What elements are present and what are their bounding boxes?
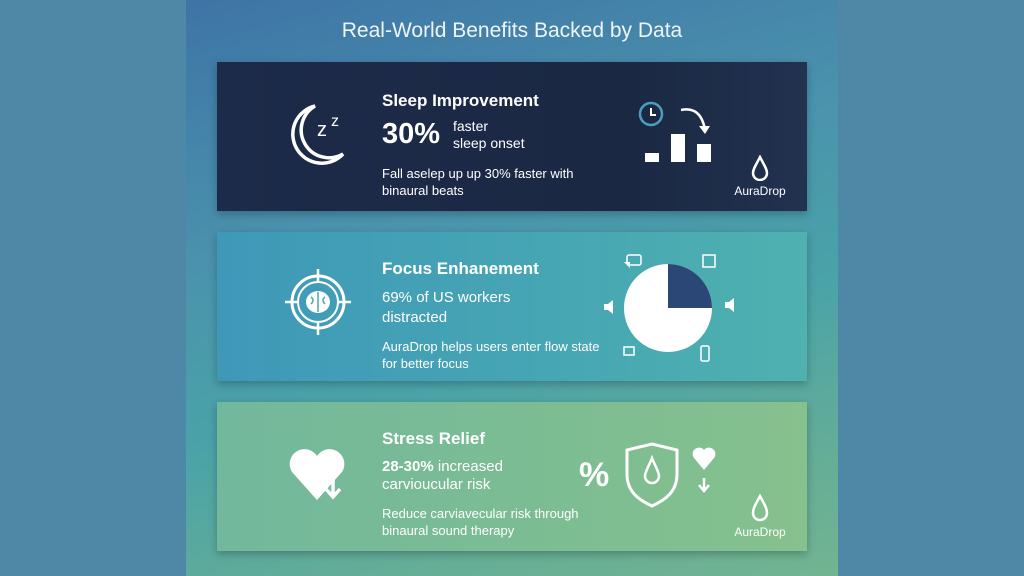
description: binaural sound therapy (382, 523, 514, 538)
icon: heart down (290, 449, 344, 500)
stat: 69% of US workers (382, 289, 510, 306)
stat: 28-30% increased (382, 458, 503, 475)
description: binaural beats (382, 183, 464, 198)
stat label: sleep onset (453, 135, 525, 151)
description (382, 506, 579, 538)
stat: 30% (382, 118, 440, 150)
heading: Stress Relief (382, 429, 485, 448)
description: for better focus (382, 356, 469, 371)
stat (382, 289, 510, 326)
description: Reduce carviavecular risk through (382, 506, 579, 521)
logo: AuraDrop (734, 525, 786, 539)
icon: moon: z (317, 119, 327, 141)
stat: carvioucular risk (382, 476, 490, 493)
description (382, 166, 574, 198)
title: Real-World Benefits Backed by Data (342, 19, 682, 42)
heading: Sleep Improvement (382, 91, 539, 110)
pie chart (604, 254, 734, 362)
icon: moon (291, 104, 344, 165)
panel: focus (217, 232, 807, 381)
icons: percent shield heart: % (579, 456, 609, 494)
logo (734, 155, 786, 198)
description: AuraDrop helps users enter flow state (382, 339, 600, 354)
description (382, 339, 600, 371)
icon: clock bar chart (638, 102, 711, 162)
icons: percent shield heart (579, 442, 716, 508)
logo: AuraDrop (734, 184, 786, 198)
stat label: faster (453, 118, 488, 134)
description: Fall aselep up up 30% faster with (382, 166, 574, 181)
stat (382, 458, 503, 493)
icon: brain target (285, 269, 351, 335)
logo (734, 494, 786, 539)
panel: stress (217, 402, 807, 551)
stat label (453, 118, 525, 151)
icon: moon: z (331, 113, 339, 130)
stat: distracted (382, 309, 447, 326)
heading: Focus Enhanement (382, 259, 539, 278)
panel: sleep (217, 62, 807, 211)
